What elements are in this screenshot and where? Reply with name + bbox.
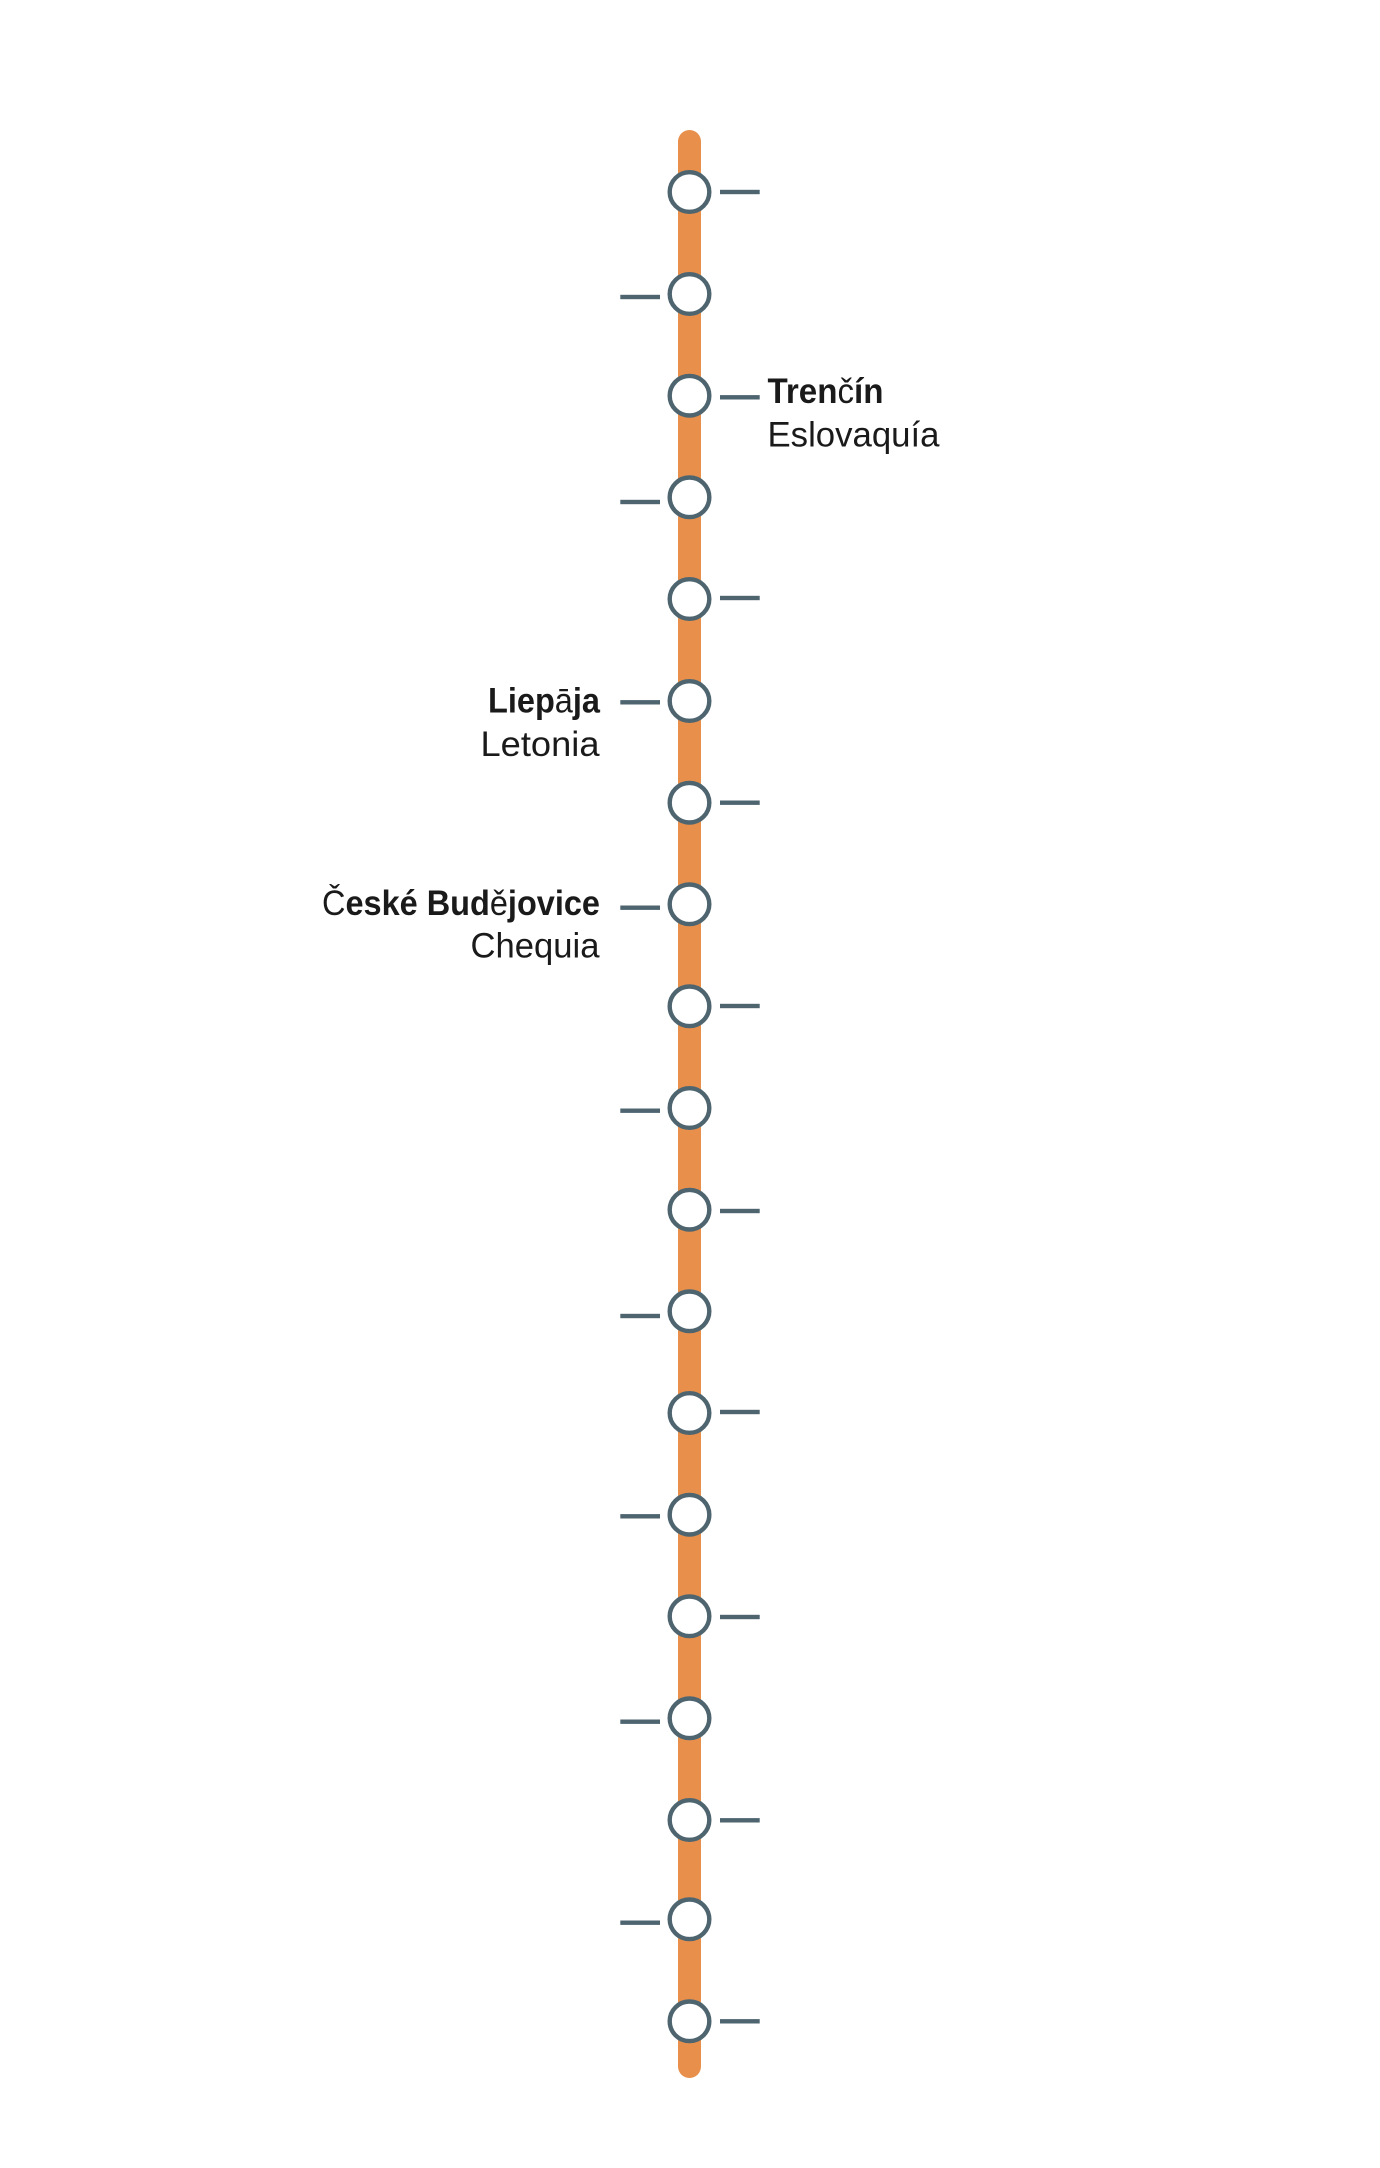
stop 4 (620, 478, 709, 517)
label: Trenčín, Eslovaquía (768, 372, 940, 455)
stop 15 (670, 1596, 760, 1636)
stop 7 (670, 783, 760, 822)
label: České Budějovice, Chequia: Chequia (470, 927, 600, 966)
stop 19 (670, 2002, 760, 2041)
stop 3: Trenčín (670, 376, 760, 416)
stop 10 (620, 1088, 709, 1128)
label: České Budějovice, Chequia: České Budějovice (322, 884, 600, 923)
stop 18 (620, 1900, 709, 1939)
label: Liepāja, Letonia (480, 682, 600, 764)
stop 11 (670, 1190, 760, 1229)
stop 13 (670, 1393, 760, 1433)
label: Liepāja, Letonia: Liepāja (488, 682, 600, 721)
label: Trenčín, Eslovaquía: Eslovaquía (768, 416, 940, 455)
stop 9 (670, 986, 760, 1026)
label: Liepāja, Letonia: Letonia (480, 725, 600, 764)
stop 5 (670, 579, 760, 619)
label: Trenčín, Eslovaquía: Trenčín (768, 372, 884, 411)
orange vertical line (678, 130, 701, 2078)
stop 1 (670, 172, 760, 212)
stop 14 (620, 1495, 709, 1534)
stop 8: České Budějovice (620, 884, 709, 924)
stop 12 (620, 1292, 709, 1331)
stop 17 (670, 1800, 760, 1840)
stop 2 (620, 274, 709, 314)
stop 6: Liepāja (620, 681, 709, 721)
stop 16 (620, 1698, 709, 1738)
stops and ticks (620, 172, 760, 2041)
label: České Budějovice, Chequia (322, 884, 600, 966)
